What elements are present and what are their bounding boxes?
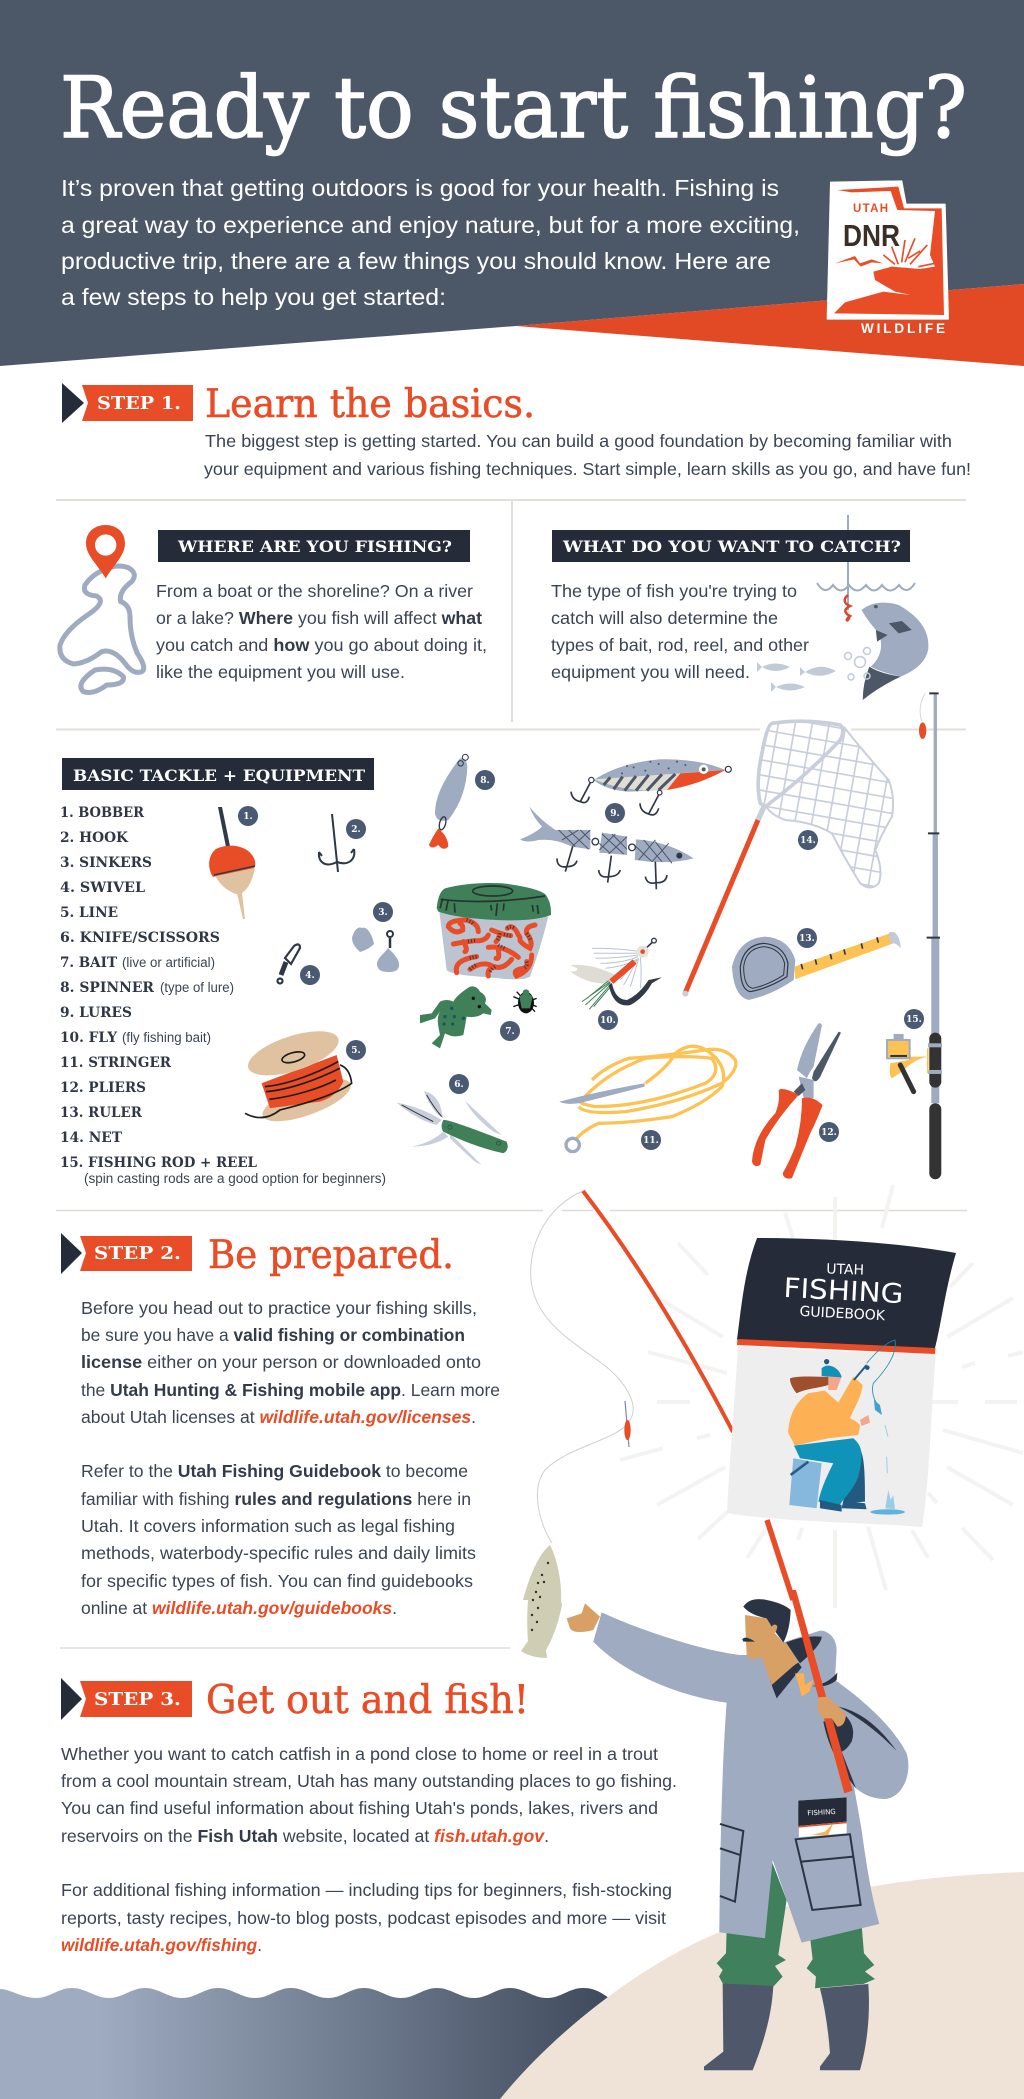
step 2 text xyxy=(81,1298,500,1618)
intro text: It’s proven that getting outdoors is good for your health. Fishing is xyxy=(61,175,779,201)
icon: beetle xyxy=(513,989,537,1013)
step 1 heading: Learn the basics. xyxy=(205,382,535,427)
step 3 text: from a cool mountain stream, Utah has many outstanding places to go fishing. xyxy=(61,1771,677,1791)
tackle list: (spin casting rods are a good option for beginners) xyxy=(84,1171,386,1186)
icon: fly xyxy=(570,938,662,1009)
step 1 text xyxy=(204,431,971,479)
pockets xyxy=(720,1824,861,1910)
number badges: 3. xyxy=(378,908,388,918)
tackle list xyxy=(60,805,386,1186)
heading: basic tackle xyxy=(62,758,374,790)
number badges: 8. xyxy=(480,776,490,786)
icon: frog xyxy=(420,986,492,1048)
panel: where are you fishing xyxy=(60,525,487,692)
heading box: WHAT DO YOU WANT TO CATCH? xyxy=(562,537,901,556)
text: types of bait, rod, reel, and other xyxy=(551,635,809,655)
text xyxy=(156,581,487,682)
icon: top lure xyxy=(571,759,731,815)
angler figure xyxy=(567,1590,908,2070)
step 2 badge xyxy=(61,1233,192,1274)
step 2 text: familiar with fishing rules and regulations here in xyxy=(81,1489,471,1509)
text: The type of fish you're trying to xyxy=(551,581,797,601)
number badges: 7. xyxy=(505,1027,515,1037)
step 1 text: your equipment and various fishing techniques. Start simple, learn skills as you go, and have fun! xyxy=(204,459,971,479)
step 2 text: about Utah licenses at wildlife.utah.gov/licenses. xyxy=(81,1407,476,1427)
number badges xyxy=(238,770,924,1150)
pointing hand xyxy=(567,1603,600,1632)
heading box xyxy=(552,530,910,562)
tackle list: 10. FLY xyxy=(60,1030,117,1046)
step 1 badge: STEP 1. xyxy=(97,393,181,414)
guidebook xyxy=(727,1238,956,1527)
tackle list: 3. SINKERS xyxy=(60,855,152,871)
title: Ready to start fishing? xyxy=(60,59,967,157)
step 3 text: reservoirs on the Fish Utah website, located at fish.utah.gov. xyxy=(61,1826,549,1846)
tackle list: 9. LURES xyxy=(60,1005,132,1021)
heading box xyxy=(158,530,470,562)
tackle list: (fly fishing bait) xyxy=(122,1030,211,1045)
fishing rod lower xyxy=(767,1520,793,1600)
intro text: productive trip, there are a few things you should know. Here are xyxy=(61,248,771,274)
step 3 badge: STEP 3. xyxy=(94,1689,181,1710)
step 1 badge xyxy=(62,383,193,423)
text: catch will also determine the xyxy=(551,608,778,628)
number badges: 6. xyxy=(454,1080,464,1090)
number badges: 13. xyxy=(799,934,815,944)
tackle list: (live or artificial) xyxy=(122,955,215,970)
step 2 heading: Be prepared. xyxy=(208,1233,454,1278)
icon: spool of line xyxy=(243,1022,356,1130)
step 3 text xyxy=(61,1744,677,1955)
text: equipment you will need. xyxy=(551,662,750,682)
boots xyxy=(704,1983,869,2070)
text: like the equipment you will use. xyxy=(156,662,405,682)
icon: sinkers xyxy=(352,927,399,972)
text: you catch and how you go about doing it, xyxy=(156,635,487,655)
icon: lake outline xyxy=(60,566,144,692)
tackle list: 5. LINE xyxy=(60,905,118,921)
heading box: WHERE ARE YOU FISHING? xyxy=(177,537,452,556)
panel: what do you want to catch xyxy=(551,515,928,700)
intro text: a great way to experience and enjoy nature, but for a more exciting, xyxy=(61,212,800,238)
number badges: 15. xyxy=(906,1015,922,1025)
icon: bait bucket with worms xyxy=(437,883,551,979)
book illustration: ice fisher xyxy=(788,1340,905,1515)
fishing line, bobber and hooked trout xyxy=(521,1191,633,1658)
step 2 text: Before you head out to practice your fishing skills, xyxy=(81,1298,477,1318)
tackle list: 12. PLIERS xyxy=(60,1080,146,1096)
head, hood and arm xyxy=(742,1590,897,1793)
icon: tape ruler xyxy=(732,932,901,1000)
logo: Utah DNR Wildlife: UTAH xyxy=(853,203,888,215)
number badges: 14. xyxy=(800,836,816,846)
step 2 text: online at wildlife.utah.gov/guidebooks. xyxy=(81,1598,397,1618)
tackle list: 7. BAIT xyxy=(60,955,117,971)
number badges: 2. xyxy=(351,825,361,835)
number badges: 1. xyxy=(243,812,253,822)
number badges: 5. xyxy=(351,1046,361,1056)
icon: bobber xyxy=(209,807,255,919)
icon: segmented lure xyxy=(520,807,694,889)
book title: FISHING xyxy=(783,1273,904,1310)
step 3 text: wildlife.utah.gov/fishing. xyxy=(61,1935,262,1955)
tackle list: 2. HOOK xyxy=(60,830,129,846)
logo: Utah DNR Wildlife xyxy=(827,181,948,336)
step 3 badge xyxy=(61,1678,192,1720)
fishing rod upper xyxy=(583,1191,733,1432)
tackle list: 11. STRINGER xyxy=(60,1055,172,1071)
tackle list: 4. SWIVEL xyxy=(60,880,146,896)
icon: jumping fish xyxy=(757,515,928,700)
step 3 text: You can find useful information about fishing Utah's ponds, lakes, rivers and xyxy=(61,1798,658,1818)
number badges: 11. xyxy=(643,1136,659,1146)
step 3 text: Whether you want to catch catfish in a pond close to home or reel in a trout xyxy=(61,1744,658,1764)
step 2 text: Refer to the Utah Fishing Guidebook to become xyxy=(81,1461,468,1481)
icon: hook xyxy=(319,814,354,872)
tackle list: 8. SPINNER xyxy=(60,980,155,996)
tackle list: 6. KNIFE/SCISSORS xyxy=(60,930,220,946)
step 3 text: For additional fishing information — including tips for beginners, fish-stocking xyxy=(61,1880,672,1900)
tackle list: 14. NET xyxy=(60,1130,122,1146)
intro text: a few steps to help you get started: xyxy=(61,284,446,310)
icon: fishing rod and reel xyxy=(887,693,942,1179)
heading: basic tackle: BASIC TACKLE + EQUIPMENT xyxy=(73,766,366,785)
tackle list: 1. BOBBER xyxy=(60,805,145,821)
step 1 text: The biggest step is getting started. You can build a good foundation by becoming familiar with xyxy=(205,431,952,451)
trousers xyxy=(717,1857,875,1988)
logo: Utah DNR Wildlife: DNR xyxy=(843,218,900,253)
water waves xyxy=(0,1988,612,2099)
number badges: 12. xyxy=(821,1128,837,1138)
number badges: 9. xyxy=(610,809,620,819)
step 2 badge: STEP 2. xyxy=(94,1243,181,1264)
logo: Utah DNR Wildlife: WILDLIFE xyxy=(861,321,945,336)
icon: stringer xyxy=(559,1046,736,1152)
tackle list: (type of lure) xyxy=(160,980,234,995)
book title: UTAH xyxy=(826,1261,864,1279)
step 2 text: license either on your person or downloaded onto xyxy=(81,1352,481,1372)
number badges: 10. xyxy=(600,1016,616,1026)
text: From a boat or the shoreline? On a river xyxy=(156,581,473,601)
mini guidebook xyxy=(798,1797,847,1837)
step 3 text: reports, tasty recipes, how-to blog posts, podcast episodes and more — visit xyxy=(61,1908,666,1928)
icon: landing net xyxy=(682,719,894,997)
step 2 text: methods, waterbody-specific rules and daily limits xyxy=(81,1543,476,1563)
step 2 text: the Utah Hunting & Fishing mobile app. Learn more xyxy=(81,1380,500,1400)
tackle list: 13. RULER xyxy=(60,1105,143,1121)
tackle list: 15. FISHING ROD + REEL xyxy=(60,1155,257,1171)
number badges: 4. xyxy=(305,971,315,981)
book title xyxy=(783,1261,904,1324)
step 3 heading: Get out and fish! xyxy=(206,1678,529,1723)
step 2 text: be sure you have a valid fishing or combination xyxy=(81,1325,465,1345)
step 2 text: Utah. It covers information such as legal fishing xyxy=(81,1516,455,1536)
icon: map pin xyxy=(86,525,125,578)
step 2 text: for specific types of fish. You can find guidebooks xyxy=(81,1571,473,1591)
coat xyxy=(593,1612,908,1943)
header banner xyxy=(0,0,1024,366)
text xyxy=(551,581,809,682)
icon: pliers xyxy=(752,1023,841,1179)
mini guidebook: FISHING xyxy=(807,1808,836,1817)
icon: spinner xyxy=(429,754,468,849)
text: or a lake? Where you fish will affect what xyxy=(156,608,482,628)
icon: pocket knife xyxy=(397,1092,508,1165)
book title: GUIDEBOOK xyxy=(799,1304,886,1324)
icon: swivel xyxy=(278,944,300,984)
intro text xyxy=(61,175,800,310)
shore hill xyxy=(500,1872,1024,2099)
